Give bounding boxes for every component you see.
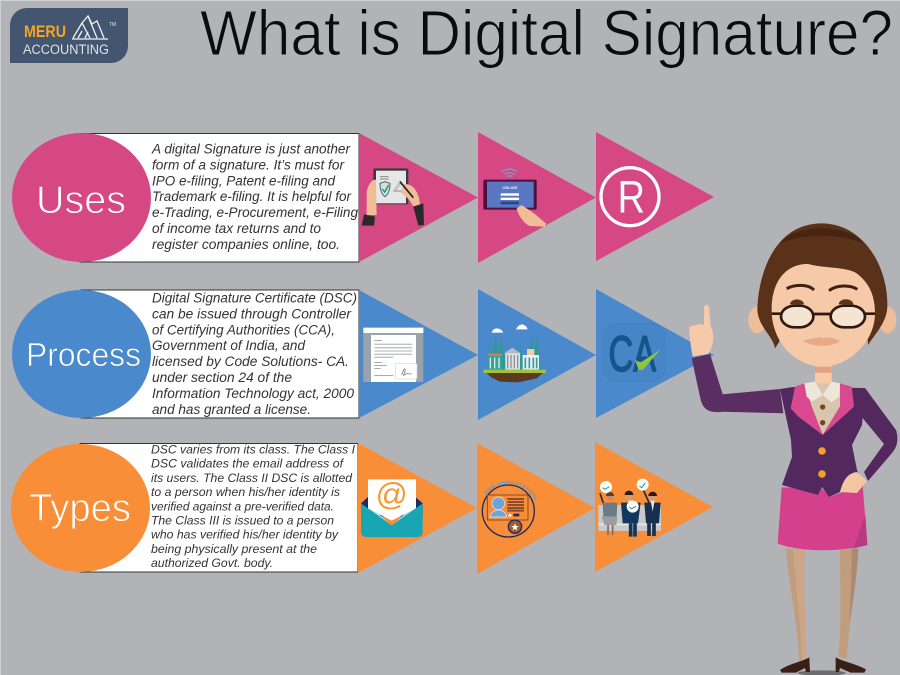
types text box: authorized Govt. body.: [151, 556, 273, 570]
panel: types: [11, 442, 713, 574]
types text box: [80, 442, 358, 572]
icon: signed document: [363, 328, 423, 382]
icon: government buildings on island: [483, 324, 546, 382]
icon: pre-verification badge: [482, 480, 538, 538]
process text box: of Certifying Authorities (CCA),: [152, 322, 335, 337]
types triangle 1: [358, 443, 477, 573]
illustration: woman pointing upward: [689, 223, 897, 675]
uses triangle 1: [359, 133, 478, 262]
logo: Meru Accounting: MERU: [24, 22, 66, 41]
types text box: verified against a pre-verified data.: [151, 499, 334, 513]
process triangle 2: [478, 289, 596, 420]
process text box: under section 24 of the: [152, 370, 292, 385]
uses label: Uses: [36, 179, 126, 222]
process text box: licensed by Code Solutions- CA.: [152, 354, 349, 369]
process triangle 3: [596, 289, 714, 418]
types text box: to a person when his/her identity is: [151, 485, 340, 499]
logo: Meru Accounting: [10, 8, 128, 63]
process triangle 1: [359, 290, 478, 418]
icon: email envelope: [361, 476, 423, 537]
process circle: [12, 290, 151, 418]
icon: people holding check signs: [598, 479, 661, 537]
process text box: Digital Signature Certificate (DSC): [152, 290, 357, 306]
uses text box: IPO e-filing, Patent e-filing and: [152, 173, 335, 188]
uses circle: [12, 133, 151, 262]
woman skirt: [778, 485, 867, 550]
icon: online login tablet: [483, 169, 546, 227]
uses text box: register companies online, too.: [152, 237, 340, 252]
types text box: DSC validates the email address of: [151, 457, 345, 471]
uses text box: Trademark e-filing. It is helpful for: [152, 189, 351, 204]
panel: process: [12, 289, 714, 420]
uses triangle 3: [596, 132, 714, 261]
types text box: who has verified his/her identity by: [151, 528, 339, 542]
icon: registered mark: [601, 168, 659, 226]
icon: hands signing on tablet: [362, 168, 424, 226]
uses text box: [80, 134, 359, 262]
icon: pre-verification badge: PRE-VERIFICATION: [484, 480, 538, 500]
types triangle 3: [595, 442, 713, 572]
types text box: its users. The Class II DSC is allotted: [151, 471, 353, 485]
uses text box: form of a signature. It’s must for: [152, 157, 345, 172]
types circle: [11, 444, 150, 572]
icon: email envelope: @: [376, 476, 408, 512]
process text box: and has granted a license.: [152, 402, 311, 417]
panel: uses: [12, 132, 714, 263]
process text box: can be issued through Controller: [152, 306, 352, 321]
icon: online login tablet: ONLINE: [502, 185, 518, 190]
woman shadow and legs: [780, 548, 866, 675]
types triangle 2: [477, 443, 595, 574]
uses text box: e-Trading, e-Procurement, e-Filing: [152, 205, 358, 220]
process text box: Government of India, and: [152, 338, 305, 353]
process label: Process: [26, 336, 141, 373]
process text box: Information Technology act, 2000: [152, 386, 354, 401]
woman right hand on hip: [840, 472, 867, 493]
types text box: The Class III is issued to a person: [151, 514, 334, 528]
types text box: being physically present at the: [151, 542, 317, 556]
process text box: [81, 290, 359, 418]
uses text box: A digital Signature is just another: [151, 142, 350, 156]
woman jacket: [692, 354, 897, 497]
uses text box: of income tax returns and to: [152, 221, 321, 236]
logo: Meru Accounting: TM: [109, 22, 116, 28]
icon: pre-verification badge: ★: [511, 522, 520, 533]
icon: CA logo: CA: [609, 326, 656, 382]
uses triangle 2: [478, 132, 596, 263]
types label: Types: [29, 487, 131, 530]
types text box: DSC varies from its class. The Class I: [151, 442, 356, 456]
logo: Meru Accounting: ACCOUNTING: [23, 42, 109, 57]
woman head, shirt and pointing hand: [689, 223, 896, 435]
icon: registered mark: R: [618, 171, 645, 222]
